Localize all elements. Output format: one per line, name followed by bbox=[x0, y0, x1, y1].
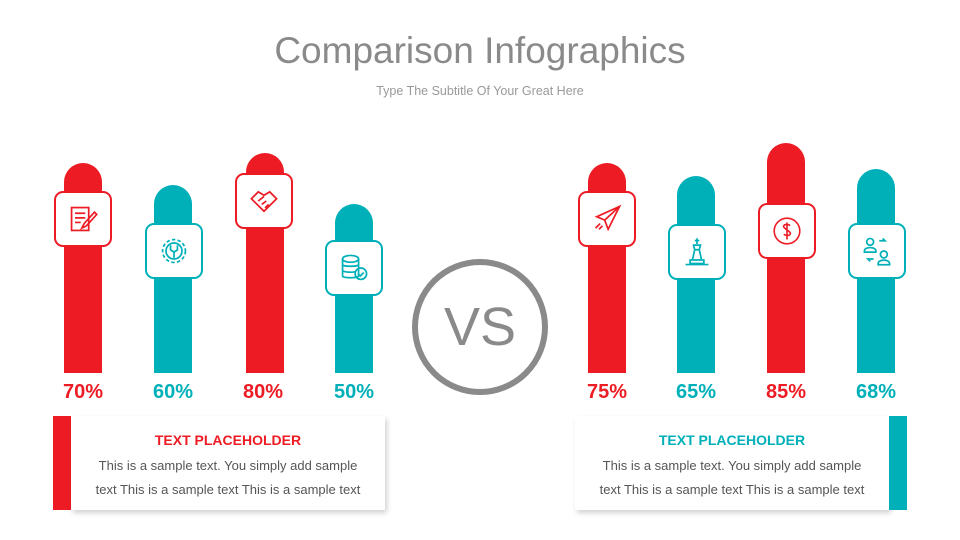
bar: 65% bbox=[677, 176, 715, 373]
icon: paper plane bbox=[578, 191, 636, 247]
card: This is a sample text. You simply add sample bbox=[99, 458, 357, 473]
bar: 80% bbox=[246, 153, 284, 373]
panel: right text bbox=[574, 416, 907, 516]
label 60%: 60% bbox=[153, 381, 193, 403]
icon: chess king bbox=[668, 224, 726, 280]
icon: handshake bbox=[235, 173, 293, 229]
card: text This is a sample text This is a sample text bbox=[96, 482, 360, 497]
icon: database check bbox=[325, 240, 383, 296]
bar: 75% bbox=[588, 163, 626, 373]
icon: gear wrench bbox=[145, 223, 203, 279]
card: TEXT PLACEHOLDER bbox=[659, 432, 805, 448]
bar: 68% bbox=[857, 169, 895, 373]
subtitle: Type The Subtitle Of Your Great Here bbox=[376, 84, 584, 98]
bar: 50% bbox=[335, 204, 373, 373]
panel: left text bbox=[53, 416, 390, 516]
teal strip bbox=[889, 416, 907, 510]
label 70%: 70% bbox=[63, 381, 103, 403]
label 80%: 80% bbox=[243, 381, 283, 403]
bar: 60% bbox=[154, 185, 192, 373]
label 75%: 75% bbox=[587, 381, 627, 403]
label 65%: 65% bbox=[676, 381, 716, 403]
label 68%: 68% bbox=[856, 381, 896, 403]
card: TEXT PLACEHOLDER bbox=[155, 432, 301, 448]
bar: 70% bbox=[64, 163, 102, 373]
VS circle: VS bbox=[444, 297, 516, 357]
bar: 85% bbox=[767, 143, 805, 373]
label 85%: 85% bbox=[766, 381, 806, 403]
VS circle bbox=[412, 259, 548, 395]
card: This is a sample text. You simply add sample bbox=[603, 458, 861, 473]
card bbox=[575, 416, 889, 510]
red strip bbox=[53, 416, 71, 510]
icon: document bbox=[54, 191, 112, 247]
label 50%: 50% bbox=[334, 381, 374, 403]
icon: dollar bbox=[758, 203, 816, 259]
icon: user exchange bbox=[848, 223, 906, 279]
card: text This is a sample text This is a sample text bbox=[600, 482, 864, 497]
title: Comparison Infographics bbox=[274, 30, 686, 71]
card bbox=[71, 416, 385, 510]
